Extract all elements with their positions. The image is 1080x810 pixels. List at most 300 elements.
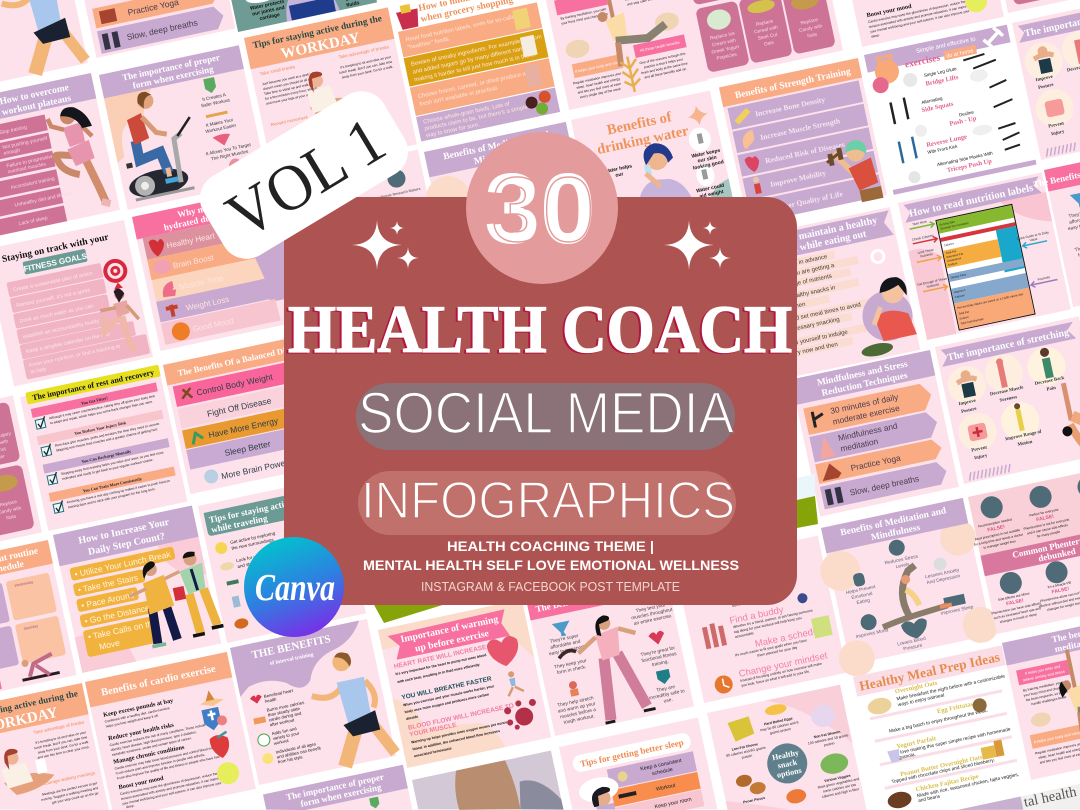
nutrition facts table: Total Fat bbox=[945, 249, 957, 255]
icon: basket bbox=[395, 2, 421, 31]
card: water protects joints top: fluids bbox=[346, 0, 360, 9]
card: proper form bottom bbox=[263, 765, 412, 810]
icon: woman lifting dumbbell bbox=[824, 137, 884, 208]
card: resistance bands: use. bbox=[663, 698, 673, 705]
card: benefits of meditation right: handle challenges better bbox=[1031, 695, 1068, 706]
arrows: label callouts bbox=[909, 198, 1058, 310]
card: hair photo bbox=[412, 750, 563, 810]
card: workout plateaus: Inconsistent training bbox=[10, 176, 55, 191]
card: resistance bands bbox=[526, 569, 694, 736]
icon: woman with pillow bbox=[577, 774, 623, 810]
card: healthy swaps top: Replace Ice bbox=[709, 31, 736, 42]
icon: exercise bike rider bbox=[110, 84, 204, 202]
icon and text: benefit list bbox=[191, 72, 257, 180]
card: benefits of a balanced diet: Have More Energy bbox=[208, 415, 280, 440]
card: workout plateaus: Not pushing yourself bbox=[2, 135, 48, 151]
tag: VOL 1 bbox=[190, 81, 418, 269]
decoration: hatch bbox=[968, 464, 1012, 481]
card: resistance bands: and warm up your bbox=[557, 701, 597, 715]
card: benefits of meditation and mindfulness: Improves Mood bbox=[855, 627, 889, 640]
card: benefits of cardio exercise: Manage chronic conditions bbox=[113, 744, 186, 766]
card: healthy meal prep ideas: Egg Frittatas bbox=[936, 701, 974, 715]
card: nutrition labels: Footnote bbox=[1037, 275, 1051, 282]
card: workout plateaus: How to overcome bbox=[0, 83, 70, 107]
card: water protects joints top: cartilage bbox=[259, 12, 281, 22]
icons: strength symbols bbox=[735, 110, 766, 195]
card: workout schedule: Wednesday bbox=[14, 580, 34, 588]
sparkles left bbox=[352, 220, 419, 270]
nutrition facts table: Saturated Fat bbox=[946, 252, 964, 259]
card: minimize grocery shopping: Read food nutrition labels, even for so-called bbox=[405, 14, 519, 43]
card: rest and recovery: Although it may seem counterintuitive, taking time off gives your body time bbox=[49, 394, 156, 420]
card: healthy snack options: 100 calories and 18 grams bbox=[808, 733, 849, 746]
icon: kettlebells bbox=[867, 54, 903, 95]
card: meditation yoga top: All those health benefits bbox=[640, 41, 680, 53]
icon: water speech bubbles bbox=[600, 124, 732, 224]
card: common phentermine myths debunked: Most prescription is not suitable bbox=[974, 528, 1021, 541]
icons: grocery items bbox=[506, 7, 554, 118]
card: staying active while traveling: Tips for staying active bbox=[208, 497, 293, 525]
card: interval training benefits: after workout bbox=[269, 717, 295, 727]
card: nutrition labels: Nutrients bbox=[926, 282, 940, 289]
icon: snack badge: Healthy bbox=[771, 748, 800, 762]
card: benefits of cardio exercise: obesity, heart disease, high blood pressure, type 2 diabetes, bbox=[110, 730, 197, 752]
card: healthy meal prep ideas: ways to enjoy oatmeal bbox=[897, 692, 945, 708]
card: mindfulness stress reduction: Slow, deep breaths bbox=[849, 473, 920, 498]
card: better sleep: schedule bbox=[651, 767, 674, 777]
card: find a buddy: Change your mindset bbox=[738, 650, 829, 680]
card: meditation yoga top: your busy mind and change how bbox=[561, 12, 609, 26]
card: healthy swaps left edge bbox=[0, 395, 42, 562]
card: workday top: WORKDAY bbox=[279, 30, 361, 62]
card: mindfulness stress reduction: moderate exercise bbox=[832, 403, 901, 427]
card: common phentermine myths debunked: Phentermine can have side effects bbox=[991, 601, 1042, 616]
card: healthy swaps top: Cream with bbox=[711, 38, 737, 48]
card: healthy snack options: Most green vegetables and bbox=[817, 777, 860, 790]
card: fitness goals: Know your nutrition, or find a tracking to bbox=[29, 344, 121, 369]
card: interval training benefits: variety to your bbox=[272, 730, 300, 741]
card: healthy swaps top: Replace bbox=[800, 17, 819, 27]
card: resistance bands: They keep your bbox=[554, 658, 588, 671]
card: workday left: get your step count up on the go. bbox=[52, 791, 100, 805]
card: workday left: moving. Suggest a walking meeting and bbox=[41, 786, 99, 802]
card: staying active while traveling: and stay fit bbox=[237, 559, 260, 569]
card: proper form bottom: The importance of proper bbox=[285, 772, 385, 802]
card: staying active while traveling: while traveling bbox=[210, 513, 269, 535]
card: staying active while traveling: Look for ways bbox=[236, 552, 265, 563]
card: meditation yoga top: practice is that it helps your bbox=[644, 57, 684, 69]
card: better sleep bbox=[559, 717, 717, 810]
card: better sleep: Workout bbox=[656, 783, 677, 793]
card: healthy meal prep ideas: Topped with chocolate chips and sliced blueberry. bbox=[891, 757, 995, 785]
card: meditation yoga top: brain and body at the same time bbox=[641, 61, 688, 75]
card: fitness goals: Create a sustainable plan of action bbox=[13, 271, 94, 293]
card: meditation yoga top: and all these benefits add up. bbox=[644, 67, 687, 80]
card: nutrition labels: Get Enough of These bbox=[917, 276, 948, 287]
card: importance of stretching upper right: Injury bbox=[1051, 129, 1066, 137]
card: why stay hydrated: Good Mood bbox=[192, 316, 235, 334]
icon: heart beat bbox=[486, 634, 522, 669]
card: importance of stretching: Posture bbox=[961, 407, 977, 415]
card: nutrition labels: Limit These bbox=[917, 248, 934, 255]
card: workout plateaus: Lack of sleep bbox=[18, 215, 48, 227]
card: healthy swaps top: Candy with bbox=[799, 23, 823, 34]
card: benefits of meditation right: It helps your body and mind bbox=[1034, 731, 1080, 744]
card: meditation yoga top: every single day of the week bbox=[580, 87, 621, 99]
card: healthy snack options bbox=[707, 685, 867, 810]
card: interval training benefits: and abilities can benefit bbox=[276, 745, 322, 760]
header bbox=[99, 45, 244, 98]
card: resistance bands: They test your bbox=[635, 602, 667, 614]
subtitle: MENTAL HEALTH SELF LOVE EMOTIONAL WELLNESS bbox=[363, 557, 739, 573]
card: healthy snack options: some calories are low bbox=[823, 783, 857, 794]
card: healthy meal prep ideas: Make a big batch to enjoy throughout the week. bbox=[889, 708, 988, 735]
card: healthy snack options: Pecan Pieces bbox=[743, 796, 766, 804]
card: warming up before exercise: dioxide bbox=[406, 715, 419, 721]
card: warming up before exercise: body uses more oxygen and produces more carbon bbox=[404, 692, 489, 714]
card: benefits of cardio exercise: Combined with a healthy diet, cardio exercise bbox=[104, 706, 170, 724]
card: minimize grocery shopping: Choose whole-grain foods. Lots of bbox=[423, 101, 510, 126]
card: minimize grocery shopping: way to know for sure. bbox=[425, 122, 481, 139]
card: daily step count: • Pace Around bbox=[80, 589, 135, 611]
card: workday left: Take advantage of breaks bbox=[33, 719, 85, 735]
card: importance of stretching: Improve Range of bbox=[1005, 430, 1042, 442]
card: healthy diet while eating out: diet while eating out bbox=[781, 228, 868, 257]
card: healthy meal prep ideas: Overnight Oats bbox=[894, 680, 938, 696]
card: healthy snack options: may be 80 calories and 6 bbox=[760, 720, 799, 732]
card: daily step count bbox=[53, 504, 229, 673]
card: benefits of meditation behind panel bbox=[416, 122, 595, 291]
sparkles right bbox=[664, 220, 731, 270]
card: nutrition labels: Quick Guide to % Daily bbox=[1016, 230, 1050, 241]
card: benefits of cardio exercise: It can reduce pain and improve function in people with arthritis. bbox=[115, 753, 206, 776]
card: interval training benefits: cardio during and bbox=[268, 711, 302, 722]
card: workday left: Meetings are the perfect excuse to get bbox=[42, 781, 98, 797]
nutrition facts table: Vitamin A bbox=[953, 288, 966, 294]
card: interval training benefits: Beneficial heart bbox=[263, 688, 294, 699]
card: water protects joints top: our joints and bbox=[252, 5, 285, 18]
icon: woman with band bbox=[572, 609, 656, 726]
card: workout plateaus: Failure to progressively bbox=[6, 153, 58, 170]
card: benefits of cardio exercise: Cardio exercise reduces the risk of many conditions. These include bbox=[109, 723, 206, 747]
icons: yoga, shield, heart, smile bbox=[198, 688, 241, 787]
card: workday top: Reward movement bbox=[270, 114, 309, 127]
card: workday left: lunch break. But if you can, take time bbox=[34, 735, 88, 750]
card: benefits of meditation and mindfulness: And Depression bbox=[926, 573, 961, 586]
card: benefits of drinking water bbox=[571, 90, 739, 257]
icon: woman in pink running bbox=[46, 103, 111, 213]
card: healthy meal prep ideas: Peanut Butter Overnight Oats bbox=[900, 754, 984, 778]
card: rest and recovery: to adapt and repair, which helps you come back stronger than you were. bbox=[50, 399, 154, 425]
card: mental health cover bbox=[957, 778, 1080, 810]
card: meditation yoga top: It helps your body and mind bbox=[575, 60, 621, 74]
card: healthy swaps top: Greek Yogurt bbox=[711, 44, 740, 56]
card: healthy snack options: Various Veggies bbox=[824, 774, 851, 783]
card: common phentermine myths debunked: FALSE! bbox=[1006, 598, 1025, 607]
card: nutrition labels bbox=[898, 172, 1071, 340]
card: exercises at home: With Front Kick bbox=[927, 144, 958, 155]
card: healthy diet while eating out: Ensure you are getting a bbox=[770, 263, 836, 282]
card: healthy diet while eating out: How to maintain a healthy bbox=[765, 215, 878, 249]
nutrition facts table: Percent Daily Values are based on a 2,000 calorie diet. bbox=[957, 292, 1024, 310]
card: interval training benefits: Individuals of all ages bbox=[275, 741, 316, 755]
icon: woman eating salad bbox=[848, 275, 920, 359]
card: healthy snack options: 80 calories and 8G grams bbox=[726, 746, 766, 758]
card: benefits of meditation right: your busy mind and change how bbox=[1023, 684, 1071, 698]
card: exercises at home: Single Leg Glute bbox=[923, 66, 957, 78]
icons: benefit symbols bbox=[249, 694, 276, 765]
card: find a buddy: something new to keep it fresh bbox=[732, 594, 780, 608]
template caption: INSTAGRAM & FACEBOOK POST TEMPLATE bbox=[421, 579, 680, 594]
badge: 30: 30 bbox=[492, 159, 594, 261]
card: meditation yoga top: By training meditation, you calm bbox=[560, 7, 607, 21]
icon: water speech bubbles: Water helps bbox=[604, 163, 633, 175]
card: interval training benefits bbox=[230, 619, 396, 785]
card: benefits of cardio exercise: your mental well-being and your self-esteem. It can also improve your bbox=[122, 781, 223, 806]
card: resistance bands: tough workout. bbox=[563, 713, 595, 726]
card: rest and recovery: You Get Fitter! bbox=[81, 395, 109, 406]
card: common phentermine myths debunked: It's a Miracle Pill bbox=[1047, 580, 1072, 589]
card: warming up before exercise: When you exercise and your muscle works harder, your bbox=[403, 684, 495, 707]
heading: HEALTH COACH: HEALTH COACH bbox=[288, 291, 792, 367]
card: healthy swaps top: Oats bbox=[763, 40, 775, 48]
card: cardio top: Boost your mood bbox=[866, 3, 913, 19]
icon: runner bbox=[304, 646, 396, 770]
card: find a buddy: them planned for your day bbox=[757, 645, 798, 658]
card: common phentermine myths debunked: Phentermine is not for everyone bbox=[1023, 517, 1070, 531]
card: workout schedule bbox=[0, 540, 77, 704]
card: mental health cover: tal health bbox=[1022, 784, 1079, 810]
card: healthy swaps top: Popsicles bbox=[716, 52, 738, 62]
card: importance of stretching: Decrease Muscle bbox=[990, 386, 1024, 398]
card: interval training runner top left bbox=[0, 0, 88, 92]
card: common phentermine myths debunked: FALSE! bbox=[987, 524, 1006, 534]
card: common phentermine myths debunked: FALSE! bbox=[1051, 586, 1070, 596]
icons: band benefits bbox=[552, 602, 674, 704]
card: importance of stretching: Prevent bbox=[971, 445, 988, 454]
card: nutrition labels: Nutrients bbox=[920, 252, 934, 259]
card: common phentermine myths debunked: and it can cause side effects bbox=[1027, 523, 1069, 535]
card: fitness goals: Keep a tangible calendar on the wall bbox=[26, 331, 110, 355]
icon: snack badge: snack bbox=[777, 757, 798, 770]
card: daily step count: Daily Step Count? bbox=[87, 531, 166, 558]
card: benefits of meditation behind panel: Mindfulness bbox=[473, 147, 525, 167]
heading: HEALTH COACH: HEALTH COACH bbox=[286, 292, 790, 368]
card: rest and recovery: You Can Train More Consistently bbox=[82, 476, 143, 493]
card: proper form bottom: form when exercising bbox=[300, 782, 383, 809]
card: healthy swaps top: Nuts bbox=[807, 31, 818, 39]
card: resistance bands: They're super bbox=[549, 633, 579, 645]
card: healthy meal prep ideas: I love making this super simple recipe with homemade bbox=[897, 726, 1011, 756]
icon and text: benefit list: Safer Workout bbox=[201, 97, 231, 108]
card: workday top: and move your legs at your desk. bbox=[266, 92, 314, 106]
icons: stretching figures bbox=[954, 347, 1064, 442]
card: benefits of meditation right: By training meditation, you calm bbox=[1023, 679, 1069, 693]
icon: blood cells bbox=[503, 697, 541, 732]
card: fitness goals: to help bbox=[30, 366, 47, 376]
card: importance of stretching upper right bbox=[1012, 0, 1080, 160]
card: rest and recovery: You Reduce Your Injury Risk bbox=[74, 420, 127, 436]
icons: meditation symbols bbox=[845, 528, 971, 649]
card: warming up before exercise: blood. In addition, the enhanced blood flow increases bbox=[412, 729, 500, 751]
card: warming up before exercise: Warming up helps provides more oxygen means per ounce of bbox=[411, 719, 513, 745]
card: healthy swaps top: Steel Cut bbox=[757, 32, 778, 42]
card: workout plateaus: overload muscles bbox=[7, 161, 47, 175]
card: benefits of cardio exercise: Reduce your health risks bbox=[108, 721, 175, 742]
card: rest and recovery: The importance of rest and recovery bbox=[31, 368, 155, 402]
icon: water speech bubbles: our bbox=[615, 171, 624, 179]
card: meditation yoga top bbox=[540, 0, 708, 110]
card: rest and recovery bbox=[19, 365, 187, 531]
nutrition facts table: Servings Per Container bbox=[940, 221, 969, 231]
card: importance of stretching: Pain bbox=[1046, 386, 1057, 393]
card: common phentermine myths debunked: for many people bbox=[1036, 530, 1061, 538]
card: resistance bands: training. bbox=[651, 659, 669, 668]
card: workday top: It's tempting to sit and relax on your bbox=[340, 55, 392, 70]
card: mindfulness stress reduction bbox=[791, 350, 959, 516]
card: rest and recovery: motivated and ready to get back to your regular workout routine. bbox=[62, 458, 154, 481]
icon: water speech bubbles: aid weight bbox=[699, 189, 724, 200]
card: exercises at home: exercises bbox=[904, 53, 941, 71]
icon: yoga woman bbox=[1052, 637, 1080, 741]
icon: target bbox=[101, 257, 131, 291]
card: healthy diet while eating out: every now and then bbox=[786, 342, 838, 359]
card: benefits of strength training: Increase Bone Density bbox=[754, 95, 826, 118]
card: cardio top: your mental well-being and your self-esteem. It can also improve your bbox=[870, 9, 971, 34]
card: benefits of a balanced diet: Sleep Better bbox=[224, 438, 272, 458]
card: interval training benefits: health bbox=[264, 696, 277, 704]
icon and text: benefit list: It Makes Your bbox=[205, 117, 234, 128]
card: mindfulness stress reduction: 30 minutes of daily bbox=[829, 392, 900, 416]
card: warming up before exercise bbox=[378, 599, 551, 768]
card: staying active while traveling: Get active by exploring bbox=[230, 531, 276, 545]
tag: VOL 1: VOL 1 bbox=[215, 104, 397, 253]
card: warming up before exercise: associated hemostasis bbox=[414, 746, 452, 758]
card: resistance band benefits right edge bbox=[1031, 140, 1080, 310]
card: workday top: Take small breaks bbox=[259, 64, 296, 76]
card: nutrition labels: Check Calories bbox=[912, 233, 934, 242]
card: find a buddy: accountable bbox=[735, 631, 754, 639]
card: resistance bands: muscles before a bbox=[559, 707, 597, 720]
card: workday top: doesn't mean you should sit all day. bbox=[263, 76, 314, 91]
card: benefits of cardio exercise: metabolic syndrome, stroke and certain types of cancer. bbox=[111, 736, 192, 757]
card: benefits of strength training: Improve Mobility bbox=[769, 168, 827, 189]
card: mindfulness stress reduction: Practice Yoga bbox=[850, 452, 902, 473]
card: workout plateaus: Unhealthy diet and lifestyle bbox=[14, 190, 74, 209]
card: behind the VOL tag with gear icon: Lifestyle Research Matters bbox=[378, 187, 421, 200]
card: interval training benefits: from hiit style bbox=[277, 754, 304, 765]
card: minimize grocery shopping: and added sugars go by many different names, bbox=[412, 45, 532, 76]
card: resistance bands: They're great for bbox=[640, 645, 676, 658]
ribbon title: up before exercise bbox=[414, 628, 491, 655]
icon and text: benefit list: It Creates A bbox=[202, 92, 227, 102]
card: workout plateaus: workout plateaus bbox=[1, 94, 72, 118]
card: exercises at home: Alternating bbox=[921, 96, 943, 105]
nutrition facts table bbox=[936, 204, 1035, 330]
card: interval training benefits: than steady state bbox=[267, 706, 301, 718]
card: why stay hydrated: Healthy Heart bbox=[166, 231, 216, 250]
card: cardio top: tension associated with anxiety and promote relaxation. It can improve bbox=[869, 4, 970, 29]
card: find a buddy: Even if you have been losing steam bbox=[727, 587, 783, 603]
card: benefits of meditation right: the brain responds, so you can bbox=[1025, 689, 1071, 702]
card: daily step count: How to Increase Your bbox=[77, 517, 171, 547]
card: meditation yoga top: and lets you feel more at ease bbox=[577, 82, 621, 95]
pill: SOCIAL MEDIA: SOCIAL MEDIA bbox=[358, 381, 734, 446]
heading band: debunked bbox=[1037, 546, 1077, 564]
icon: woman at desk bbox=[303, 64, 360, 122]
card: rest and recovery: Rest days give muscles, joints and tendons the time they need to recover. bbox=[54, 421, 161, 448]
card: interval training benefits: Adds fun and bbox=[271, 726, 298, 736]
card: daily step count: Move bbox=[98, 638, 121, 652]
icon: stretching woman bbox=[1053, 377, 1080, 454]
card: cardio top: Cardio exercise may ease the gloominess of depression, reduce the bbox=[868, 0, 966, 24]
nutrition facts table: Sodium bbox=[959, 315, 970, 321]
card: healthy snack options: Low-Fat Cheese bbox=[731, 742, 758, 752]
card: why stay hydrated bbox=[132, 186, 307, 351]
card: minimize grocery shopping: making it harder to tell just how much is in there. bbox=[414, 52, 537, 83]
card: daily step count: • Take the Stairs bbox=[77, 572, 139, 595]
card: exercises at home: do at home bbox=[946, 48, 974, 60]
icons: exercise figures bbox=[885, 50, 1025, 185]
icon: snack badge: options bbox=[776, 766, 802, 780]
icon: woman at desk bbox=[0, 741, 57, 797]
card: healthy snack options: protein bbox=[824, 741, 835, 747]
card: common phentermine myths debunked: Perfect for everyone bbox=[1029, 507, 1059, 518]
card: healthy diet while eating out: unnecessary snacking bbox=[781, 317, 840, 335]
icon and text: benefit list: The Right Muscles bbox=[210, 149, 249, 162]
card: cardio top: sleep. bbox=[871, 33, 880, 39]
icon: wheat bbox=[619, 55, 643, 94]
card: exercises at home bbox=[864, 25, 1037, 195]
icon and text: benefit list: It Allows You To Target bbox=[205, 142, 252, 156]
card: benefits of meditation and mindfulness: Lessens Anxiety bbox=[925, 567, 960, 580]
card: why stay hydrated: Muscle Tone bbox=[179, 273, 225, 292]
card: workday top: Tips for staying active during the bbox=[252, 14, 383, 51]
card: resistance bands: The Benefits of Resistance Bands bbox=[535, 578, 662, 614]
card: benefits of meditation and mindfulness: Levels bbox=[895, 561, 911, 570]
card: healthy diet while eating out bbox=[751, 207, 920, 379]
card: benefits of a balanced diet: The Benefits Of a Balanced Diet bbox=[177, 344, 293, 378]
card: mindfulness stress reduction: Reduction Techniques bbox=[821, 371, 909, 399]
icons: mindfulness figures bbox=[808, 408, 848, 506]
card: healthy meal prep ideas bbox=[853, 645, 1031, 810]
card: healthy diet while eating out: Allow yourself to indulge bbox=[784, 329, 849, 349]
card: cardio top bbox=[833, 0, 1004, 47]
main title panel bbox=[284, 132, 797, 605]
card: find a buddy: you look, focus on what it will add to your life. bbox=[741, 669, 810, 688]
icon: water speech bubbles: looking good bbox=[692, 159, 724, 172]
card: exercises at home: Alternating Side Planks With bbox=[936, 150, 994, 167]
icons: food bbox=[734, 751, 854, 810]
nutrition facts table: Total Fat bbox=[958, 310, 969, 316]
card: exercises at home: Side Squats bbox=[921, 100, 954, 114]
nutrition facts table: Sodium bbox=[948, 261, 958, 267]
card: interval training benefits: workout bbox=[273, 738, 290, 746]
card: fitness goals: FITNESS GOALS bbox=[23, 251, 88, 274]
card: green nutrition fragment below panel bbox=[373, 603, 449, 623]
badge: 30 bbox=[466, 132, 618, 284]
icons: meals bbox=[866, 675, 1011, 810]
card: benefits of meditation and mindfulness: Eating bbox=[856, 597, 871, 606]
card: exercises at home: Bridge Lifts bbox=[925, 74, 960, 88]
card: workday top: away from your desk. Go for a walk. bbox=[341, 65, 394, 79]
card: healthy meal prep ideas: Chicken Fajitas Recipe bbox=[915, 773, 980, 793]
card: benefits of drinking water: drinking water bbox=[596, 123, 691, 158]
card: minimize grocery shopping: Beware of sneaky ingredients. For example, sodium bbox=[410, 34, 542, 68]
card: healthy meal prep ideas: granola. bbox=[898, 752, 916, 761]
card: healthy diet while eating out: Try and set meal times to avoid bbox=[779, 302, 861, 325]
icons: checkboxes bbox=[35, 416, 65, 513]
